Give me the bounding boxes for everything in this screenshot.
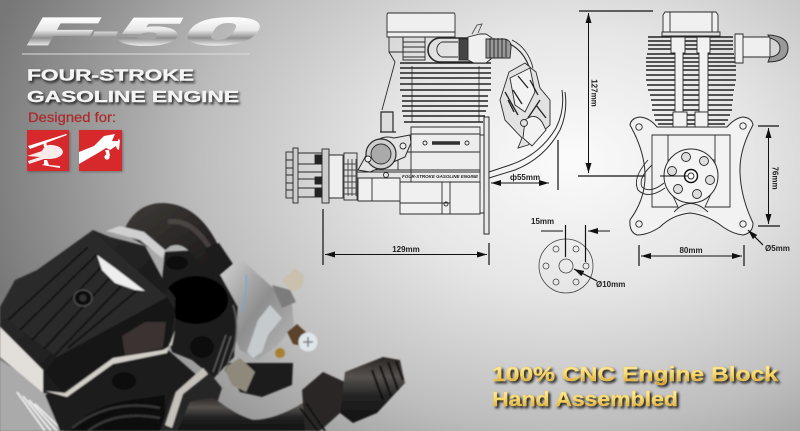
mounting plate — [630, 117, 753, 235]
lower band clamp and exhaust elbow — [160, 357, 405, 431]
front cylinder fins — [646, 37, 736, 124]
subtitle: four-stroke gasoline engine — [27, 68, 241, 108]
crankcase — [411, 127, 480, 190]
side view dimension: 129mm: 129mm — [392, 245, 420, 254]
exhaust stub — [735, 34, 788, 63]
upper intake elbow — [106, 203, 233, 278]
front valve cover — [663, 12, 718, 32]
front view engine line drawing — [630, 12, 788, 235]
rocker housing and exhaust loop — [382, 37, 478, 110]
carburettor — [500, 63, 550, 148]
pushrod tube — [380, 112, 396, 132]
engine model markings — [423, 141, 469, 145]
dimension: diameter 10mm: Ø10mm — [596, 280, 625, 289]
side view dimension: diameter 55mm — [491, 140, 558, 190]
side view engine line drawing — [286, 13, 566, 234]
icon: helicopter — [27, 130, 70, 172]
subtitle: four-stroke gasoline engine: GASOLINE ENGINE — [28, 91, 241, 108]
dimension: 15mm: 15mm — [531, 217, 554, 226]
cylinder fins — [400, 63, 491, 122]
subtitle: four-stroke gasoline engine: FOUR-STROKE — [28, 70, 196, 86]
firewall plate — [484, 117, 489, 234]
prop disc — [664, 149, 718, 203]
dimension: diameter 5mm: Ø5mm — [765, 244, 790, 253]
crosshair leader for 127mm — [660, 175, 688, 177]
icon: airplane — [79, 130, 123, 172]
callout: 100% CNC engine block: Hand Assembled — [494, 391, 680, 413]
blackened crankcase detail — [358, 135, 411, 172]
dimension: 127mm height: 127mm — [590, 79, 598, 107]
title: F-50 logo: 5 — [119, 12, 181, 54]
dimension: 76mm: 76mm — [770, 166, 780, 190]
callout: 100% CNC engine block: Hand Assembled — [492, 389, 678, 411]
prop drive washer drawing — [539, 239, 593, 293]
dimension: 127mm height — [578, 11, 680, 176]
callout: 100% CNC engine block: 100% CNC Engine Block — [494, 366, 781, 388]
engine markings text: FOUR-STROKE GASOLINE ENGINE — [402, 174, 479, 179]
title: F-50 logo — [22, 12, 258, 54]
dimension: diameter 5mm — [748, 230, 790, 253]
fuel loop — [636, 160, 665, 195]
crankcase outline — [652, 135, 730, 207]
dimension: diameter 10mm — [574, 269, 625, 289]
title: F-50 logo: F — [28, 12, 101, 54]
subtitle: four-stroke gasoline engine: FOUR-STROKE — [27, 68, 194, 84]
engine photo — [0, 203, 405, 431]
dimension: 15mm — [531, 217, 610, 262]
side view dimension: 129mm — [323, 209, 489, 265]
valve cover with logo — [0, 230, 175, 397]
valve cover — [387, 13, 455, 37]
side view dimension: diameter 55mm: ф55mm — [510, 173, 540, 182]
prop hub and washers — [286, 148, 357, 203]
title: F-50 logo: 0 — [185, 12, 258, 54]
heading: designed for: Designed for: — [28, 109, 116, 125]
lower silver cooling fins — [0, 360, 70, 431]
rear housing boxes — [358, 178, 480, 214]
callout: 100% CNC engine block — [492, 364, 781, 413]
subtitle: four-stroke gasoline engine: GASOLINE ENGINE — [27, 89, 239, 106]
title: F-50 logo: - — [92, 12, 118, 54]
cylinder head underside — [45, 350, 200, 431]
dimension: 80mm: 80mm — [679, 246, 703, 255]
carburettor — [222, 258, 318, 397]
cam cover boss — [366, 139, 396, 169]
intake flange — [160, 250, 238, 378]
fuel line — [489, 90, 566, 178]
exhaust pipe threads and nut — [459, 24, 533, 70]
callout: 100% CNC engine block: 100% CNC Engine Block — [492, 364, 779, 386]
dimension: 80mm — [639, 245, 744, 266]
pushrod tubes — [671, 37, 710, 131]
dimension: 76mm — [758, 126, 780, 226]
